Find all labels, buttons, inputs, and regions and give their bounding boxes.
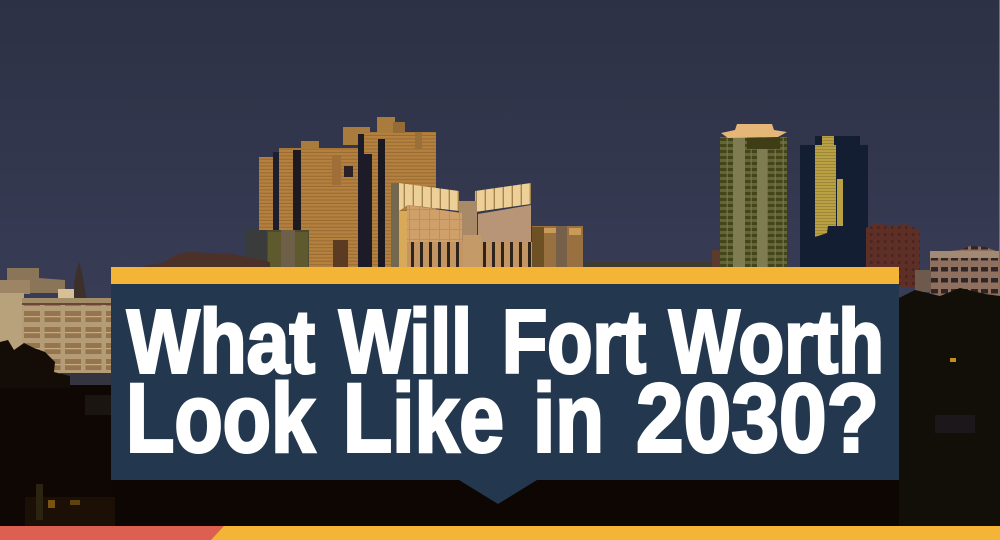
skyline: left factory and clock tower xyxy=(0,262,112,385)
title: Like xyxy=(343,364,504,472)
title: Will xyxy=(339,292,472,392)
skyline: left tower cluster xyxy=(259,117,436,267)
banner callout panel xyxy=(111,284,899,504)
title banner xyxy=(111,267,899,504)
skyline: glass convention building xyxy=(391,183,532,267)
skyline: low office block xyxy=(246,230,309,267)
title: Fort xyxy=(502,292,646,392)
foreground tree line xyxy=(0,288,1000,526)
skyline: right office building xyxy=(915,0,1000,300)
sky background xyxy=(0,0,1000,300)
title: What xyxy=(127,292,315,392)
skyline: residential tower xyxy=(720,124,787,267)
banner top accent bar xyxy=(111,267,899,284)
skyline: dark glass tower xyxy=(800,136,868,267)
skyline: low horizon buildings xyxy=(140,250,721,267)
skyline: brick building xyxy=(866,223,920,287)
skyline: small tan building xyxy=(532,226,583,267)
title: 2030? xyxy=(636,364,879,472)
title: in xyxy=(533,364,604,472)
title xyxy=(126,292,884,472)
bottom colour band xyxy=(0,526,1000,540)
title: Worth xyxy=(669,292,884,392)
title: Look xyxy=(126,364,316,472)
